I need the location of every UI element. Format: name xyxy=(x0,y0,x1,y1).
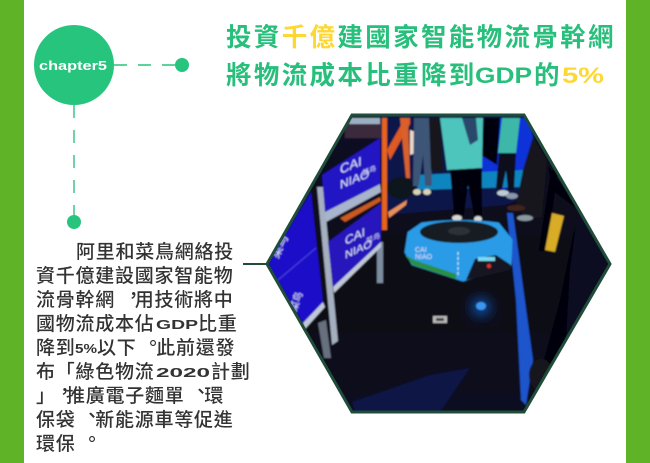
second stand base xyxy=(528,358,550,389)
white bag xyxy=(408,128,415,156)
dark suited person xyxy=(516,137,547,220)
far left blue panel xyxy=(267,192,323,323)
panel logos: 菜鸟 xyxy=(362,164,376,178)
body text: 」 xyxy=(36,386,46,407)
panel logos left xyxy=(273,235,304,313)
body text: 流骨幹網 xyxy=(36,290,115,311)
body text: 環 xyxy=(204,386,224,407)
body text: 、 xyxy=(192,382,211,403)
left panel rail xyxy=(303,302,325,329)
panel logos: NIAO xyxy=(345,238,372,262)
second teal person xyxy=(496,118,520,199)
body text: 新能源車等促進 xyxy=(95,409,234,431)
teal shirt person xyxy=(440,118,483,222)
body text: 計劃 xyxy=(211,361,251,383)
lower blue panel xyxy=(328,203,381,287)
cyan floor strip xyxy=(415,170,525,190)
vertical dashed connector with dot xyxy=(67,105,81,229)
panel logos left: 菜鸟 xyxy=(267,232,291,260)
chapter badge xyxy=(34,25,114,105)
floor blue sheen xyxy=(352,368,470,412)
left green bar xyxy=(0,0,24,463)
body text: 國物流成本佔 xyxy=(36,313,155,335)
floor light glow xyxy=(473,300,489,314)
dark reflective panel xyxy=(566,212,608,336)
body text: 用技術將中 xyxy=(135,289,234,311)
grey uprights xyxy=(317,187,383,358)
left person xyxy=(413,118,443,195)
body text: 2020 xyxy=(156,365,210,380)
body text: ， xyxy=(55,382,75,403)
orange rack xyxy=(345,118,410,230)
connector line to photo xyxy=(243,263,268,265)
title: 的 xyxy=(534,62,560,90)
blue floor stripe xyxy=(507,213,533,405)
body text: 布「綠色物流 xyxy=(36,361,155,383)
shoes xyxy=(507,205,525,211)
body text: ， xyxy=(124,286,144,307)
pole and base xyxy=(538,170,558,252)
upper shelf rail xyxy=(325,184,381,222)
panel logos xyxy=(340,154,380,262)
body text xyxy=(36,241,251,455)
bright blue backdrop xyxy=(478,118,540,190)
right dark edge xyxy=(544,166,576,364)
body text: 。 xyxy=(83,430,102,451)
panel logos: NIAO xyxy=(340,166,370,192)
orange reflection xyxy=(340,197,381,222)
yellow bag xyxy=(545,213,564,252)
chapter badge: chapter5 xyxy=(39,58,107,73)
title: 將物流成本比重降到 xyxy=(226,62,477,90)
upper blue panel xyxy=(322,138,380,212)
body text: 5% xyxy=(75,341,98,356)
title: GDP xyxy=(475,63,532,88)
robot: NIAO xyxy=(415,254,433,261)
robot: CAI xyxy=(415,247,427,254)
body text: 比重 xyxy=(198,313,238,335)
hexagon photo: warehouse robot xyxy=(260,110,615,420)
panel logos: 菜鸟 xyxy=(366,231,380,246)
panel logos: CAI xyxy=(345,225,365,248)
body text: 阿里和菜鳥網絡投 xyxy=(76,241,234,263)
rack shelf top xyxy=(349,118,380,124)
floor marker xyxy=(433,316,447,323)
body text: 降到 xyxy=(36,337,76,359)
body text: 資千億建設國家智能物 xyxy=(36,265,234,287)
body text: 保袋 xyxy=(36,410,76,431)
body text: GDP xyxy=(156,317,198,332)
black screen xyxy=(481,118,500,165)
title xyxy=(226,23,616,90)
robot xyxy=(405,221,511,280)
lower shelf rail xyxy=(333,242,381,293)
back wall xyxy=(380,115,545,215)
body text: 以下 xyxy=(97,338,137,359)
body text: 推廣電子麵單 xyxy=(66,385,185,407)
horizontal dashed connector with dot xyxy=(114,58,189,72)
body text: 此前還發 xyxy=(156,337,235,359)
body text: 、 xyxy=(83,406,102,427)
dark bag xyxy=(387,177,415,199)
panel logos left: 菜鸟 xyxy=(287,290,306,313)
panel logos: CAI xyxy=(340,154,362,177)
title: 投資千億建國家智能物流骨幹網 xyxy=(226,23,616,52)
floor background xyxy=(276,116,582,410)
body text: 。 xyxy=(144,334,163,355)
title: 5% xyxy=(562,63,604,88)
body text: 環保 xyxy=(36,434,76,455)
hexagon frame xyxy=(267,115,610,412)
right green bar xyxy=(626,0,650,463)
